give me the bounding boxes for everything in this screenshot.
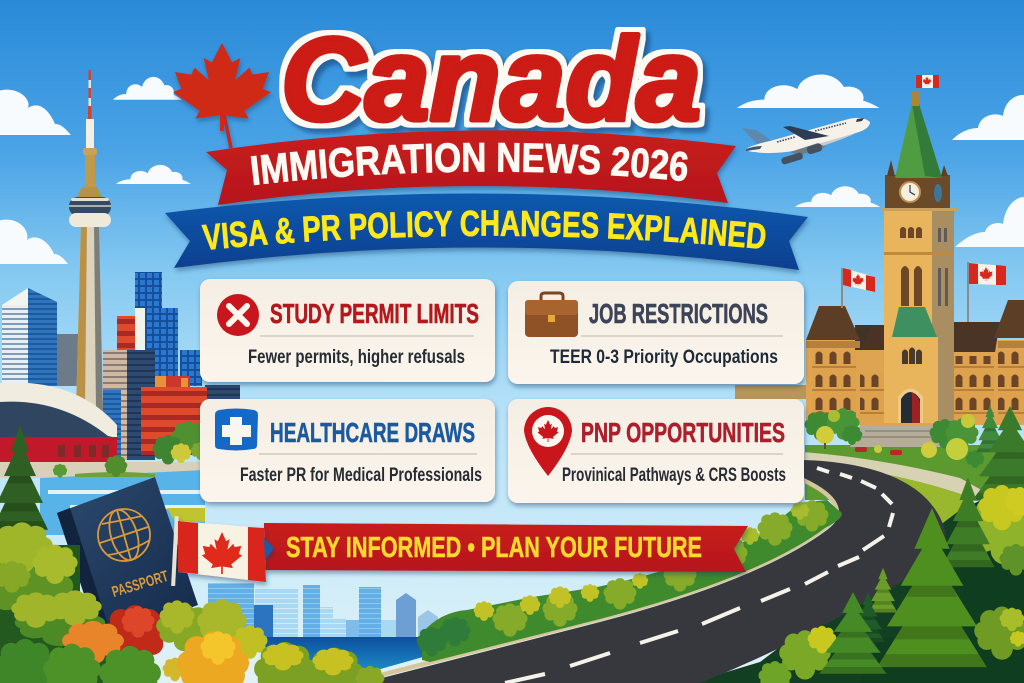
Parliament building: [735, 92, 1024, 425]
pine tree left: [0, 425, 48, 530]
icon: airplane: [742, 118, 870, 165]
heading: HEALTHCARE DRAWS: [270, 417, 475, 448]
bottom banner: [264, 523, 748, 572]
description: Provinical Pathways & CRS Boosts: [562, 465, 786, 486]
city skyline: left: [2, 272, 240, 460]
stadium: [0, 383, 117, 464]
icon: passport globe: [98, 506, 150, 564]
panel: PNP opportunities: [508, 399, 804, 503]
icon: maple leaf: [173, 43, 271, 148]
title word: Canada: [281, 14, 701, 146]
panel: healthcare draws: [200, 399, 495, 502]
heading: JOB RESTRICTIONS: [589, 298, 768, 329]
foliage bottom left: [0, 522, 384, 683]
clouds: [0, 75, 1024, 264]
icon: briefcase: [525, 293, 578, 337]
heading: PNP OPPORTUNITIES: [581, 417, 785, 448]
icon: Canada flag on banner: [171, 516, 274, 586]
description: TEER 0-3 Priority Occupations: [550, 347, 778, 368]
title: Canada: [173, 14, 701, 148]
icon: location pin: [524, 407, 572, 476]
description: Faster PR for Medical Professionals: [240, 465, 482, 486]
parliament shrubs: [805, 405, 1004, 468]
shrubs behind cards left: [53, 421, 209, 478]
panel: study permit limits: [200, 279, 495, 382]
panel: job restrictions: [508, 281, 804, 384]
passport: [57, 477, 198, 642]
waterfront ground and river: [0, 462, 205, 535]
description: Fewer permits, higher refusals: [248, 347, 465, 368]
ribbon text: IMMIGRATION NEWS 2026: [250, 142, 688, 186]
right side trees and bushes: [759, 406, 1024, 683]
icon: tower flag: [915, 75, 939, 99]
road: [378, 460, 945, 683]
heading: STUDY PERMIT LIMITS: [270, 298, 479, 329]
icon: red cross circle: [217, 294, 259, 336]
icon: medical cross: [215, 408, 258, 450]
icon: left flag on parliament: [841, 268, 875, 308]
shoreline bushes: [417, 500, 842, 662]
distant harbour skyline: [208, 583, 440, 672]
right lawn, trail and grass: [690, 425, 1024, 683]
ribbon text: VISA & PR POLICY CHANGES EXPLAINED: [201, 210, 766, 250]
passport label: PASSPORT: [110, 568, 171, 601]
CN Tower: [69, 70, 111, 412]
banner text: STAY INFORMED • PLAN YOUR FUTURE: [286, 532, 702, 564]
red ribbon: [206, 130, 738, 207]
blue ribbon: [165, 194, 810, 276]
icon: right flag on parliament: [967, 262, 1006, 322]
